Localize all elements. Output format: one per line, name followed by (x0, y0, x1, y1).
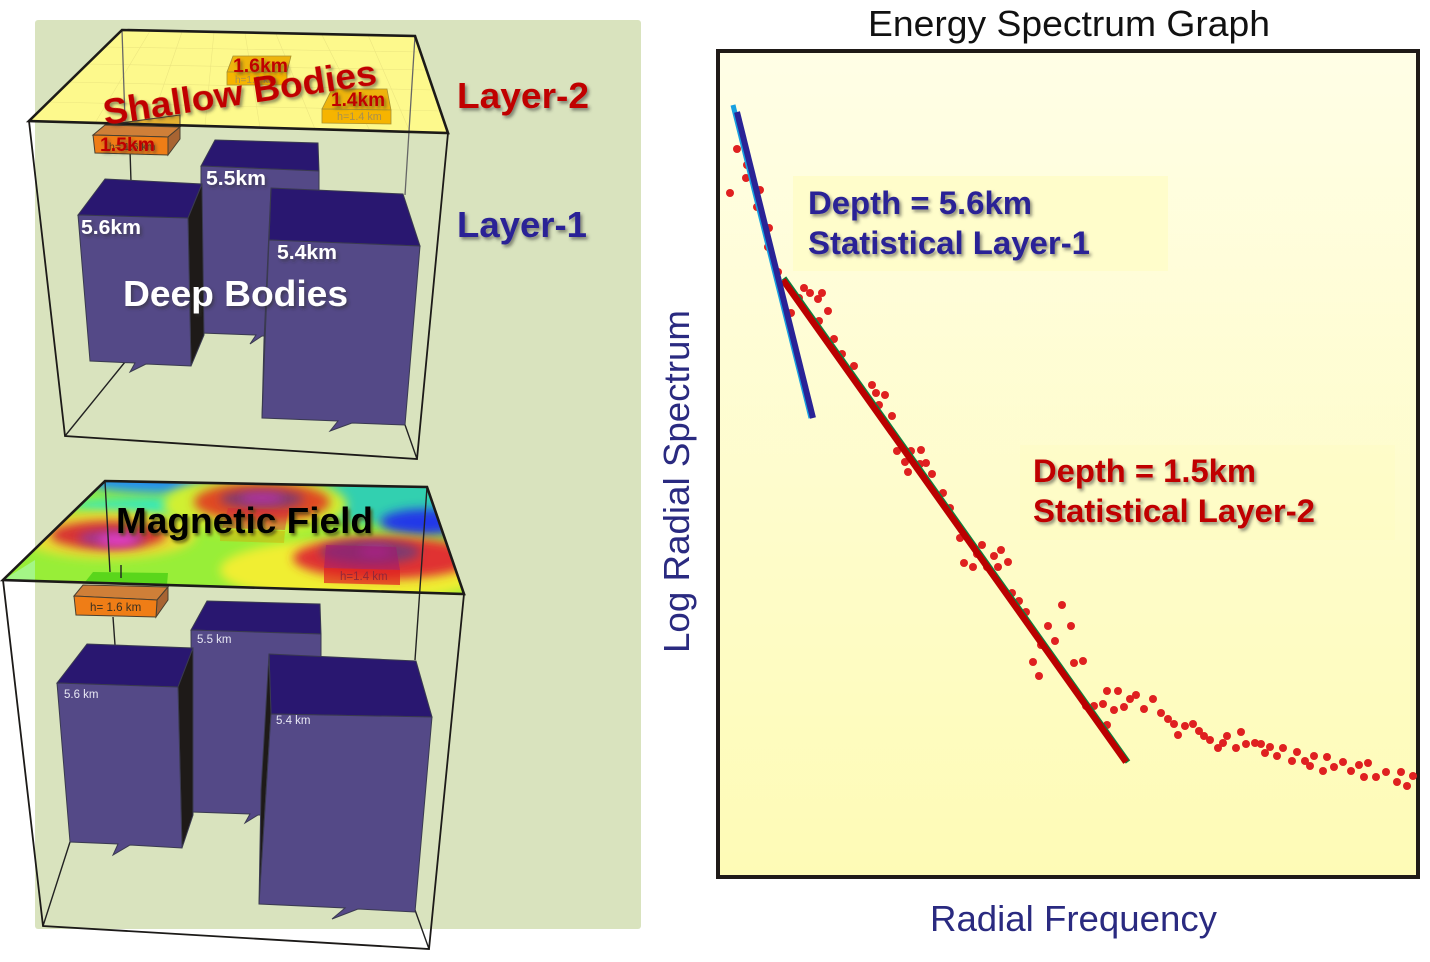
hidden green body top (85, 572, 168, 585)
front frame (3, 481, 464, 594)
shallow body h=1.6 km: h= 1.6 km (90, 601, 141, 614)
deep body 5.4 km (259, 654, 432, 919)
chart frame (718, 51, 1418, 877)
magnetic field map (6, 482, 462, 593)
fit line: layer 1 (733, 105, 813, 418)
callout text: layer 1 depth: Depth = 5.6km (808, 185, 1032, 221)
label: shallow bodies: Shallow Bodies (100, 52, 379, 133)
back frame lower lines (65, 362, 417, 459)
callout text: layer 1 depth (808, 185, 1090, 261)
y axis label: Log Radial Spectrum (656, 310, 697, 653)
x axis label: Radial Frequency (930, 898, 1217, 939)
small body 1.6 km (227, 56, 291, 86)
label: layer 2: Layer-2 (457, 75, 589, 116)
connector line (130, 150, 131, 182)
label: 1.5km: 1.5km (100, 135, 155, 156)
fit line: layer 2 (783, 278, 1128, 762)
shallow body h=1.6 km (74, 585, 168, 617)
callout text: layer 1 depth: Statistical Layer-1 (808, 225, 1090, 261)
deep body 5.5 km (201, 140, 319, 344)
deep body 5.6 km (57, 644, 193, 855)
hidden body h=1.6 km in field (220, 508, 288, 543)
small body 1.4 km (322, 89, 391, 124)
callout text: layer 2 depth: Statistical Layer-2 (1033, 493, 1315, 529)
small body 1.6 km: h=1.6 km (235, 75, 276, 86)
label: deep bodies: Deep Bodies (123, 273, 348, 314)
back frame lines (43, 481, 429, 949)
deep body 5.4 km (262, 188, 420, 431)
panel: energy spectrum chart (718, 51, 1418, 877)
hidden body h=1.4 km in field: h=1.4 km (340, 571, 388, 583)
shallow body 1.5 km: h= 1.6 km (109, 141, 156, 153)
deep body 5.6 km: 5.6 km (64, 689, 99, 701)
deep body 5.6 km (78, 179, 204, 372)
callout text: layer 2 depth: Depth = 1.5km (1033, 453, 1256, 489)
label: 5.5km: 5.5km (206, 168, 266, 190)
label: 1.4km: 1.4km (331, 90, 385, 111)
label: 5.4km: 5.4km (277, 242, 337, 264)
shallow body 1.5 km (93, 115, 180, 155)
panel: lower model with magnetic field (0, 467, 490, 949)
label: 5.6km: 5.6km (81, 217, 141, 239)
callout text: layer 2 depth (1033, 453, 1315, 529)
label: 1.6km: 1.6km (233, 56, 288, 77)
scatter data points (726, 145, 1417, 790)
back frame lines (122, 30, 415, 195)
label: layer 1: Layer-1 (457, 204, 587, 245)
callout background: layer 1 (793, 176, 1168, 271)
panel: upper statistical model (29, 30, 448, 459)
deep body 5.5 km (191, 601, 321, 823)
label: magnetic field: Magnetic Field (116, 500, 373, 541)
yellow layer plate (29, 30, 448, 133)
front frame (29, 30, 448, 133)
deep body 5.4 km: 5.4 km (276, 715, 311, 727)
small body 1.4 km: h=1.4 km (337, 111, 382, 123)
deep body 5.5 km: 5.5 km (197, 634, 232, 646)
callout background: layer 2 (1020, 445, 1395, 540)
hidden body h=1.4 km in field (324, 545, 400, 585)
chart title: Energy Spectrum Graph (868, 3, 1270, 44)
panel: 3D model background (35, 20, 641, 929)
